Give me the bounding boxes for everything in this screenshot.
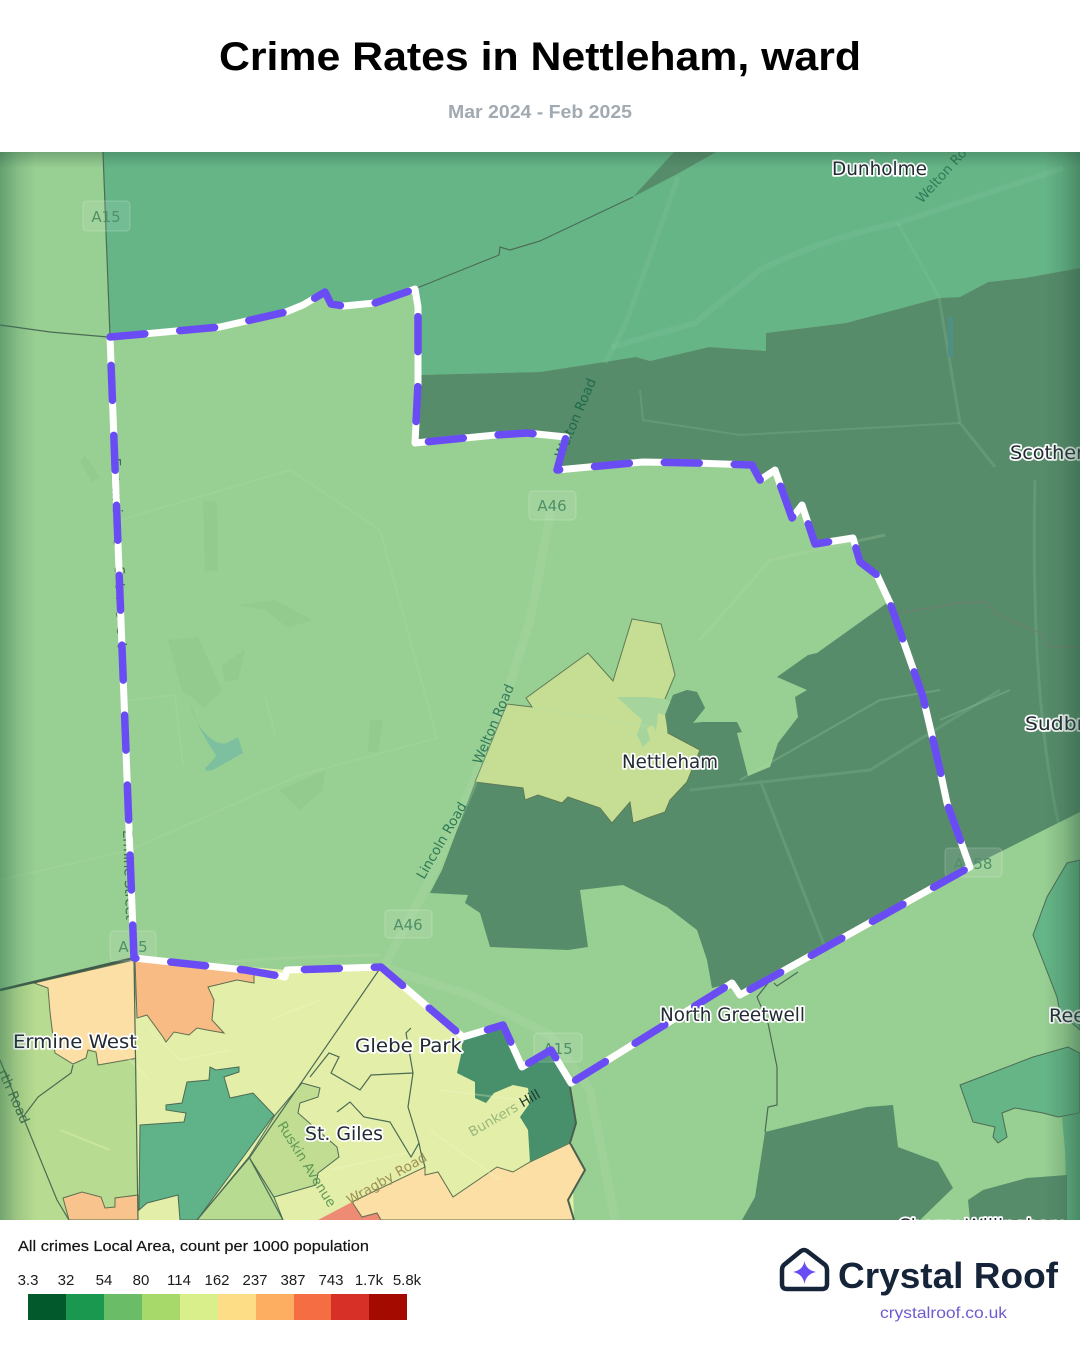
icon: house with star xyxy=(782,1250,827,1289)
place labels: Cherry Willingham xyxy=(898,1215,1067,1237)
road labels: Bunkers Hill xyxy=(466,1087,543,1140)
road shield: A15 south: A15 xyxy=(543,1040,573,1058)
region: dark village patch xyxy=(665,690,705,735)
road labels: Ermine Street xyxy=(107,458,130,648)
region: Reepham estate xyxy=(960,1047,1080,1143)
legend xyxy=(18,1238,422,1320)
legend tick labels: 237 xyxy=(242,1272,268,1289)
faint roads xyxy=(386,534,1010,967)
legend tick labels: 80 xyxy=(133,1272,149,1289)
road shield: A15 north xyxy=(83,201,130,231)
legend tick labels: 54 xyxy=(96,1272,112,1289)
logo: Crystal Roof xyxy=(782,1250,1059,1322)
place labels: North Greetwell xyxy=(660,1004,805,1026)
road labels: Welton Road xyxy=(470,682,518,767)
region: west green xyxy=(0,958,138,1220)
woodland patches xyxy=(80,455,383,810)
road shield: A46 north: A46 xyxy=(537,497,567,515)
place labels: Nettleham xyxy=(622,751,718,773)
legend tick labels: 114 xyxy=(167,1272,191,1289)
place labels: Sudbr xyxy=(1025,713,1080,735)
region: dark strip north xyxy=(633,152,716,197)
legend tick labels: 3.3 xyxy=(18,1272,38,1289)
region: orange xyxy=(135,960,254,1042)
ward boundary: Nettleham xyxy=(110,289,970,1083)
place labels: Ermine West xyxy=(13,1031,137,1053)
map edge vignette xyxy=(0,152,1080,1220)
road shield: A158: A158 xyxy=(954,855,992,873)
road shield: A158 xyxy=(945,848,1002,877)
region: dark green south of Nettleham xyxy=(430,603,970,995)
road labels: Ermine Street xyxy=(119,830,138,920)
region: Nettleham village centre xyxy=(475,619,700,823)
road labels: Wragby Road xyxy=(344,1150,430,1208)
legend colour scale xyxy=(28,1294,407,1320)
road shield: A46 south: A46 xyxy=(393,916,423,934)
road shield: A46 south xyxy=(385,910,432,938)
road labels: Welton Road xyxy=(552,376,600,461)
region: dark Cherry Willingham xyxy=(968,1175,1067,1220)
place labels: St. Giles xyxy=(305,1123,383,1145)
place labels xyxy=(13,158,1080,1237)
place labels: Glebe Park xyxy=(355,1035,462,1057)
region: orange bottom left xyxy=(63,1192,138,1220)
subtitle: date range: Mar 2024 - Feb 2025 xyxy=(448,102,632,122)
road shield: A46 north xyxy=(529,491,576,520)
region: Ruskin xyxy=(249,1083,339,1197)
pond xyxy=(190,702,243,771)
legend tick labels: 32 xyxy=(58,1272,74,1289)
logo wordmark: Crystal Roof xyxy=(838,1255,1059,1296)
region: medium green south west xyxy=(139,1067,274,1220)
region: pale yellow wards xyxy=(135,958,574,1220)
title: Crime Rates in Nettleham, ward xyxy=(219,35,861,79)
region: peach south xyxy=(352,1143,585,1220)
region: medium green north xyxy=(103,152,1080,375)
logo website: crystalroof.co.uk xyxy=(880,1305,1008,1322)
faint streets xyxy=(60,1000,520,1180)
water channel xyxy=(948,317,953,357)
place labels: Dunholme xyxy=(832,158,927,180)
road shield: A15 west: A15 xyxy=(118,938,148,956)
legend tick labels: 162 xyxy=(204,1272,230,1289)
region: Ermine West peach xyxy=(34,960,138,1065)
legend title: All crimes Local Area, count per 1000 population xyxy=(18,1238,369,1255)
region: east strip xyxy=(1062,1113,1080,1220)
road labels: Welton Ro xyxy=(913,145,971,207)
region: small village patch xyxy=(617,697,672,747)
road shield: A15 north: A15 xyxy=(91,208,121,226)
road shield: A15 south xyxy=(534,1033,582,1062)
road shield: A15 west xyxy=(110,931,156,961)
legend tick labels: 387 xyxy=(280,1272,306,1289)
road labels: Lincoln Road xyxy=(414,800,470,882)
legend tick labels: 743 xyxy=(318,1272,344,1289)
legend tick labels: 5.8k xyxy=(393,1272,422,1289)
region: dark south east xyxy=(742,1105,953,1220)
region: light green south xyxy=(197,1157,283,1220)
road labels: Ruskin Avenue xyxy=(274,1119,339,1210)
region: dark Bunkers Hill xyxy=(457,1025,576,1162)
region: east medium green xyxy=(1033,860,1080,1030)
region: red xyxy=(318,1202,381,1220)
region: dark green north east xyxy=(415,268,1080,867)
road labels xyxy=(0,145,971,1210)
boundary lines xyxy=(0,152,1080,1220)
legend tick labels: 1.7k xyxy=(355,1272,384,1289)
legend tick labels xyxy=(18,1272,422,1289)
